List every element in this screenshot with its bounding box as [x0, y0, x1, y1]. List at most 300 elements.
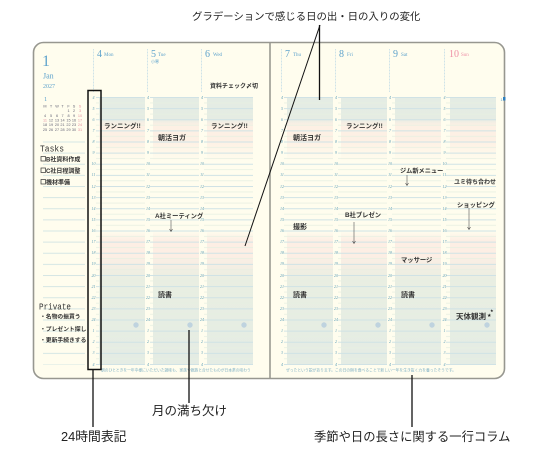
caption: gradient: グラデーションで感じる日の出・日の入りの変化 [192, 10, 421, 23]
hour labels: Thu: 5 [281, 106, 283, 111]
star: ★ [490, 308, 494, 313]
stars: ★ [487, 313, 492, 319]
spine [269, 43, 271, 378]
hour labels: Fri: 12 [334, 184, 338, 188]
mini calendar: F [67, 104, 70, 108]
hour labels: Fri: 2 [335, 339, 337, 344]
hour labels: Wed: 16 [200, 228, 204, 233]
hour labels: Sun: 19 [442, 261, 446, 266]
column: Sat [390, 49, 441, 365]
hour labels: Tue: 18 [146, 250, 150, 255]
hour labels: Mon: 20 [92, 272, 96, 278]
mini calendar: 5 [50, 114, 52, 118]
column: Tue: Tue [158, 53, 166, 58]
hour labels: Fri: 7 [335, 128, 337, 133]
hour labels: Mon: 9 [92, 150, 94, 155]
mini calendar: 31 [78, 128, 82, 132]
hour labels: Sun: 21 [442, 284, 446, 289]
hour labels: Sun: 10 [442, 161, 446, 166]
mini calendar: 8 [67, 114, 70, 118]
pointer: gradient vertical [318, 25, 320, 100]
hour labels: Sun: 3 [444, 350, 446, 355]
hour labels: Sat: 22 [388, 295, 392, 300]
note Sat massage: マッサージ [401, 256, 433, 264]
hour labels: Sat: 4 [389, 362, 391, 366]
hour labels: Mon: 8 [92, 139, 94, 144]
hour labels: Thu: 23 [280, 306, 284, 311]
mini calendar: 18 [43, 123, 47, 127]
hour labels: Sat: 3 [389, 350, 391, 355]
hour labels: Sat: 7 [389, 128, 391, 133]
hour labels: Sun: 1 [444, 328, 446, 333]
mini calendar: 21 [60, 123, 65, 127]
arrow Sat [406, 175, 408, 186]
note Sun meet up: ユミ待ち合わせ [454, 178, 496, 186]
note Sat reading: 読書 [401, 290, 415, 299]
hour labels: Sat: 8 [389, 139, 391, 144]
hour labels: Fri: 4 [335, 94, 337, 100]
hour labels: Fri: 19 [334, 261, 338, 266]
hour labels: Sun: 18 [442, 250, 446, 255]
hour labels: Mon: 4 [92, 362, 94, 366]
mini calendar: 26 [49, 128, 53, 132]
mini calendar: W [55, 104, 59, 108]
hour labels: Thu: 2 [281, 339, 283, 344]
mini calendar: 15 [66, 118, 71, 122]
hour labels: Fri: 6 [335, 117, 337, 122]
pointer: gradient diagonal [245, 25, 320, 246]
mini calendar [43, 96, 82, 132]
hour labels: Mon: 19 [92, 261, 96, 266]
mini calendar: S [79, 104, 82, 108]
hour labels: Fri: 11 [334, 172, 338, 177]
hour labels: Tue: 9 [147, 150, 149, 155]
hour labels: Wed: 3 [201, 350, 203, 355]
month tab marker: 1 [500, 97, 504, 102]
hour labels: Tue [146, 94, 150, 366]
column: Fri [336, 49, 387, 365]
hour labels: Mon: 15 [92, 217, 96, 222]
tasks heading: Tasks [40, 144, 64, 154]
hour labels: Wed: 24 [200, 317, 204, 322]
hour labels: Thu: 6 [281, 117, 283, 122]
hour labels: Tue: 1 [147, 328, 149, 333]
hour labels: Tue: 8 [147, 139, 149, 144]
mini calendar: 19 [49, 123, 53, 127]
hour labels: Fri: 3 [335, 350, 337, 355]
hour labels: Sun: 13 [442, 195, 446, 200]
mini calendar: 6 [56, 114, 58, 118]
hour labels: Thu: 9 [281, 150, 283, 155]
hour labels: Mon: 23 [92, 306, 96, 311]
note Tue yoga: 朝活ヨガ [158, 133, 186, 142]
hour labels: Sun: 17 [442, 239, 446, 244]
hour labels: Wed: 11 [200, 172, 204, 177]
hour labels: Thu: 7 [281, 128, 283, 133]
hour labels: Mon: 12 [92, 184, 96, 188]
day columns [94, 49, 496, 365]
hour labels: Wed: 14 [200, 206, 204, 211]
hour labels: Sat: 15 [388, 217, 392, 222]
hour labels: Wed: 22 [200, 295, 204, 300]
hour labels: Sun: 4 [444, 94, 446, 100]
hour labels: Sun: 6 [444, 117, 446, 122]
hour labels: Fri: 8 [335, 139, 337, 144]
hour labels: Fri: 20 [334, 272, 338, 278]
hour labels: Sun: 5 [444, 106, 446, 111]
hour labels: Thu: 4 [281, 362, 283, 366]
column: Sun: 10 [449, 49, 459, 60]
hour labels: Fri: 15 [334, 217, 338, 222]
note Wed run: ランニング!! [211, 121, 248, 130]
hour labels: Wed: 4 [201, 362, 203, 366]
hour labels: Thu: 18 [280, 250, 284, 255]
hour labels: Sun: 7 [444, 128, 446, 133]
pointer: 24-hour [92, 370, 94, 427]
arrow Fri [352, 222, 356, 244]
hour labels: Fri: 9 [335, 150, 337, 155]
hour labels: Wed: 20 [200, 272, 204, 278]
hour labels: Tue: 3 [147, 350, 149, 355]
hour labels: Mon: 6 [92, 117, 94, 122]
hour labels: Sat: 9 [389, 150, 391, 155]
hour labels: Thu: 20 [280, 272, 284, 278]
hour labels: Tue: 4 [147, 94, 149, 100]
column: Tue: 5 [151, 49, 156, 60]
note Fri presentation: B社プレゼン [345, 210, 381, 219]
hour labels: Tue: 6 [147, 117, 149, 122]
column: Thu [282, 49, 333, 365]
hour labels: Mon: 10 [92, 161, 96, 166]
hour labels: Fri: 5 [335, 106, 337, 111]
hour labels: Fri: 14 [334, 206, 338, 211]
caption: moon phase: 月の満ち欠け [152, 403, 227, 418]
hour labels: Wed: 19 [200, 261, 204, 266]
arrow Sun [468, 208, 470, 230]
hour labels: Mon: 1 [92, 328, 94, 333]
hour labels: Wed [200, 94, 204, 366]
hour labels: Thu: 14 [280, 206, 284, 211]
hour labels: Thu: 19 [280, 261, 284, 266]
hour labels: Sun: 9 [444, 150, 446, 155]
one-line column right page: ぜったという説があります。この日の餅を食べることで新しい一年を生き抜く力を養ったそうです。 [286, 368, 456, 372]
note Sun shopping: ショッピング [457, 200, 495, 209]
column: Sun: Sun [461, 53, 469, 58]
hour labels: Mon: 13 [92, 195, 96, 200]
hour labels: Mon: 17 [92, 239, 96, 244]
hour labels: Fri: 13 [334, 195, 338, 200]
hour labels: Wed: 9 [201, 150, 203, 155]
column: Fri: Fri [347, 53, 353, 58]
mini calendar: T [61, 104, 64, 108]
hour labels: Mon: 24 [92, 317, 96, 322]
hour labels: Wed: 2 [201, 339, 203, 344]
caption: one-line column: 季節や日の長さに関する一行コラム [314, 430, 510, 444]
mini calendar: 10 [78, 114, 82, 118]
hour labels: Sat: 10 [388, 161, 392, 166]
hour labels: Fri: 23 [334, 306, 338, 311]
hour labels: Sat: 11 [388, 172, 392, 177]
mini calendar: 14 [60, 118, 65, 122]
mini calendar: S [73, 104, 76, 108]
month number: 1 [42, 53, 50, 70]
hour labels: Thu: 4 [281, 94, 283, 100]
mini calendar: 13 [55, 118, 59, 122]
hour labels: Thu: 16 [280, 228, 284, 233]
column: Sat: 9 [393, 49, 398, 60]
column: Tue [148, 49, 199, 365]
hour labels: Tue: 22 [146, 295, 150, 300]
hour labels: Fri: 17 [334, 239, 338, 244]
hour labels: Fri: 22 [334, 295, 338, 300]
hour labels: Sun: 14 [442, 206, 446, 211]
hour labels: Fri: 10 [334, 161, 338, 166]
column: Thu: 7 [285, 49, 290, 60]
hour labels: Tue: 24 [146, 317, 150, 322]
mini calendar: 11 [43, 118, 47, 122]
task list [41, 156, 80, 186]
hour labels: Mon: 7 [92, 128, 94, 133]
hour labels: Thu: 11 [280, 172, 284, 177]
planner book [34, 42, 504, 378]
hour labels: Thu: 15 [280, 217, 284, 222]
private list: ・更新手続きする [40, 336, 87, 344]
hour labels: Fri: 24 [334, 317, 338, 322]
hour labels: Wed: 18 [200, 250, 204, 255]
mini calendar: 2 [73, 109, 75, 113]
column: Tue: 小寒 [151, 58, 159, 65]
hour labels: Wed: 4 [201, 94, 203, 100]
hour labels: Thu: 17 [280, 239, 284, 244]
hour labels: Mon: 21 [92, 284, 96, 289]
left month panel [39, 53, 87, 364]
note Fri run: ランニング!! [346, 121, 383, 130]
pointer: one-line column [411, 375, 413, 427]
hour labels: Sat: 13 [388, 195, 392, 200]
month name: Jan [43, 72, 54, 80]
hour labels: Mon: 11 [92, 172, 95, 177]
private list: ・名物の振買う [40, 312, 81, 320]
24-hour highlight box [88, 90, 101, 370]
hour labels: Sat: 14 [388, 206, 392, 211]
column: Fri: 8 [339, 49, 344, 60]
note Tue reading: 読書 [158, 290, 172, 299]
hour labels: Thu: 12 [280, 184, 284, 188]
task list: C社日程調整 [46, 167, 80, 175]
hour labels: Mon: 2 [92, 339, 94, 344]
hour labels: Wed: 8 [201, 139, 203, 144]
hour labels: Tue: 17 [146, 239, 150, 244]
private heading: Private [39, 302, 71, 312]
mini calendar: 3 [79, 109, 81, 113]
hour labels: Tue: 5 [147, 106, 149, 111]
column: Mon: Mon [104, 53, 114, 58]
hour labels: Mon: 3 [92, 350, 94, 355]
hour labels: Sat: 1 [389, 328, 391, 333]
hour labels: Mon: 16 [92, 228, 96, 233]
hour labels: Sat: 20 [388, 272, 392, 278]
note Thu shooting: 撮影 [293, 222, 307, 231]
note Mon run: ランニング!! [104, 121, 141, 130]
hour labels: Wed: 17 [200, 239, 204, 244]
hour labels: Mon: 22 [92, 295, 96, 300]
hour labels: Thu: 21 [280, 284, 284, 289]
hour labels: Thu: 24 [280, 317, 284, 322]
hour labels: Thu: 8 [281, 139, 283, 144]
column: Wed: Wed [213, 53, 223, 58]
hour labels: Sat: 17 [388, 239, 392, 244]
mini calendar: 27 [55, 128, 59, 132]
mini calendar: 16 [72, 118, 76, 122]
hour labels: Wed: 7 [201, 128, 203, 133]
mini calendar: 29 [66, 128, 71, 132]
hour labels: Fri: 18 [334, 250, 338, 255]
hour labels: Sun: 15 [442, 217, 446, 222]
month tab marker [500, 97, 506, 102]
hour labels: Mon: 14 [92, 206, 96, 211]
column: Mon: 4 [97, 49, 102, 60]
hour labels: Sun: 23 [442, 306, 446, 311]
mini calendar: M [43, 104, 47, 108]
note Tue meeting: A社ミーティング [155, 211, 204, 220]
hour labels: Sun: 24 [442, 317, 446, 322]
hour labels: Tue: 7 [147, 128, 149, 133]
hour labels: Sat: 18 [388, 250, 392, 255]
hour labels: Tue: 23 [146, 306, 150, 311]
hour labels: Sat [388, 94, 392, 366]
arrow Tue [170, 220, 172, 232]
column: Thu: Thu [293, 53, 302, 58]
hour labels: Fri: 1 [335, 328, 337, 333]
hour labels: Fri [334, 94, 338, 366]
hour labels: Fri: 4 [335, 362, 337, 366]
mini calendar: T [50, 104, 53, 108]
hour labels: Sun: 2 [444, 339, 446, 344]
hour labels: Fri: 21 [334, 284, 338, 289]
hour labels: Wed: 10 [200, 161, 204, 166]
column: Sun [444, 49, 496, 365]
hour labels: Tue: 10 [146, 161, 150, 166]
hour labels: Sat: 5 [389, 106, 391, 111]
one-line column left page: 朝のひとときを一年中様にいただいた調味も、家族や親族と合せたものが日本茶の味わう [101, 368, 251, 372]
private list: ・プレゼント探し [40, 325, 87, 333]
task list: 機材準備 [46, 178, 70, 186]
hour labels: Mon: 5 [92, 106, 94, 111]
note Wed deadline: 資料チェック〆切 [210, 82, 258, 90]
hour labels: Sat: 2 [389, 339, 391, 344]
hour labels: Sun: 8 [444, 139, 446, 144]
mini calendar: 12 [49, 118, 53, 122]
mini calendar: 9 [73, 114, 75, 118]
hour labels: Tue: 12 [146, 184, 150, 188]
mini calendar: 28 [60, 128, 65, 132]
mini calendar: 4 [44, 114, 46, 118]
mini calendar: 7 [61, 114, 64, 118]
hour labels: Tue: 11 [146, 172, 150, 177]
hour labels: Thu [280, 94, 284, 366]
hour labels: Thu: 10 [280, 161, 284, 166]
column: Wed: 6 [205, 49, 210, 60]
hour labels: Sat: 12 [388, 184, 392, 188]
hour labels: Tue: 13 [146, 195, 150, 200]
hour labels: Wed: 5 [201, 106, 203, 111]
year: 2027 [43, 84, 55, 90]
hour labels: Tue: 20 [146, 272, 150, 278]
hour labels: Thu: 13 [280, 195, 284, 200]
task list: B社資料作成 [46, 156, 80, 164]
hour labels: Mon: 4 [92, 94, 94, 100]
hour labels: Sat: 16 [388, 228, 392, 233]
handwritten notes [104, 82, 496, 321]
hour labels: Sun: 12 [442, 184, 446, 188]
mini calendar: 20 [55, 123, 59, 127]
hour labels: Thu: 3 [281, 350, 283, 355]
hour labels: Thu: 22 [280, 295, 284, 300]
note Thu reading: 読書 [293, 290, 307, 299]
hour labels: Sun: 16 [442, 228, 446, 233]
note Sun stargazing: 天体観測 [456, 311, 486, 321]
mini calendar: 22 [66, 123, 71, 127]
hour labels: Tue: 19 [146, 261, 150, 266]
hour labels: Sat: 19 [388, 261, 392, 266]
hour labels: Tue: 2 [147, 339, 149, 344]
hour labels: Sun [442, 94, 447, 366]
mini calendar: 23 [72, 123, 76, 127]
hour labels: Sat: 24 [388, 317, 392, 322]
hour labels: Wed: 12 [200, 184, 204, 188]
hour labels: Sun: 20 [442, 272, 446, 278]
column: Mon [94, 49, 145, 365]
hour labels: Mon [92, 94, 96, 366]
hour labels: Sat: 4 [389, 94, 391, 100]
pointer: moon phase [188, 330, 190, 403]
mini calendar: 1 [67, 109, 70, 113]
hour labels: Tue: 16 [146, 228, 150, 233]
column: Sat: Sat [401, 53, 408, 58]
hour labels: Sat: 21 [388, 284, 392, 289]
hour labels: Wed: 13 [200, 195, 204, 200]
column: Wed [202, 49, 253, 365]
hour labels: Mon: 18 [92, 250, 96, 255]
hour labels: Sun: 4 [444, 362, 446, 366]
hour labels: Sat: 23 [388, 306, 392, 311]
mini calendar: 1 [44, 96, 47, 103]
hour labels: Wed: 23 [200, 306, 204, 311]
mini calendar: 24 [78, 123, 82, 127]
private list [40, 312, 87, 344]
hour labels: Thu: 1 [281, 328, 283, 333]
mini calendar: 30 [72, 128, 76, 132]
hour labels: Tue: 15 [146, 217, 150, 222]
hour labels: Wed: 21 [200, 284, 204, 289]
hour labels: Wed: 15 [200, 217, 204, 222]
hour labels: Tue: 14 [146, 206, 150, 211]
left page ruled lines [43, 141, 85, 364]
mini calendar: 25 [43, 128, 47, 132]
note Sat gym: ジム新メニュー [400, 167, 443, 175]
mini calendar: 17 [78, 118, 82, 122]
hour labels: Fri: 16 [334, 228, 338, 233]
hour labels: Tue: 21 [146, 284, 150, 289]
hour labels: Wed: 6 [201, 117, 203, 122]
hour labels: Tue: 4 [147, 362, 149, 366]
caption: 24-hour: 24時間表記 [61, 429, 127, 444]
hour labels: Sun: 11 [443, 172, 446, 177]
hour labels: Wed: 1 [201, 328, 203, 333]
hour labels: Sun: 22 [442, 295, 446, 300]
note Thu yoga: 朝活ヨガ [293, 133, 321, 142]
hour labels: Sat: 6 [389, 117, 391, 122]
